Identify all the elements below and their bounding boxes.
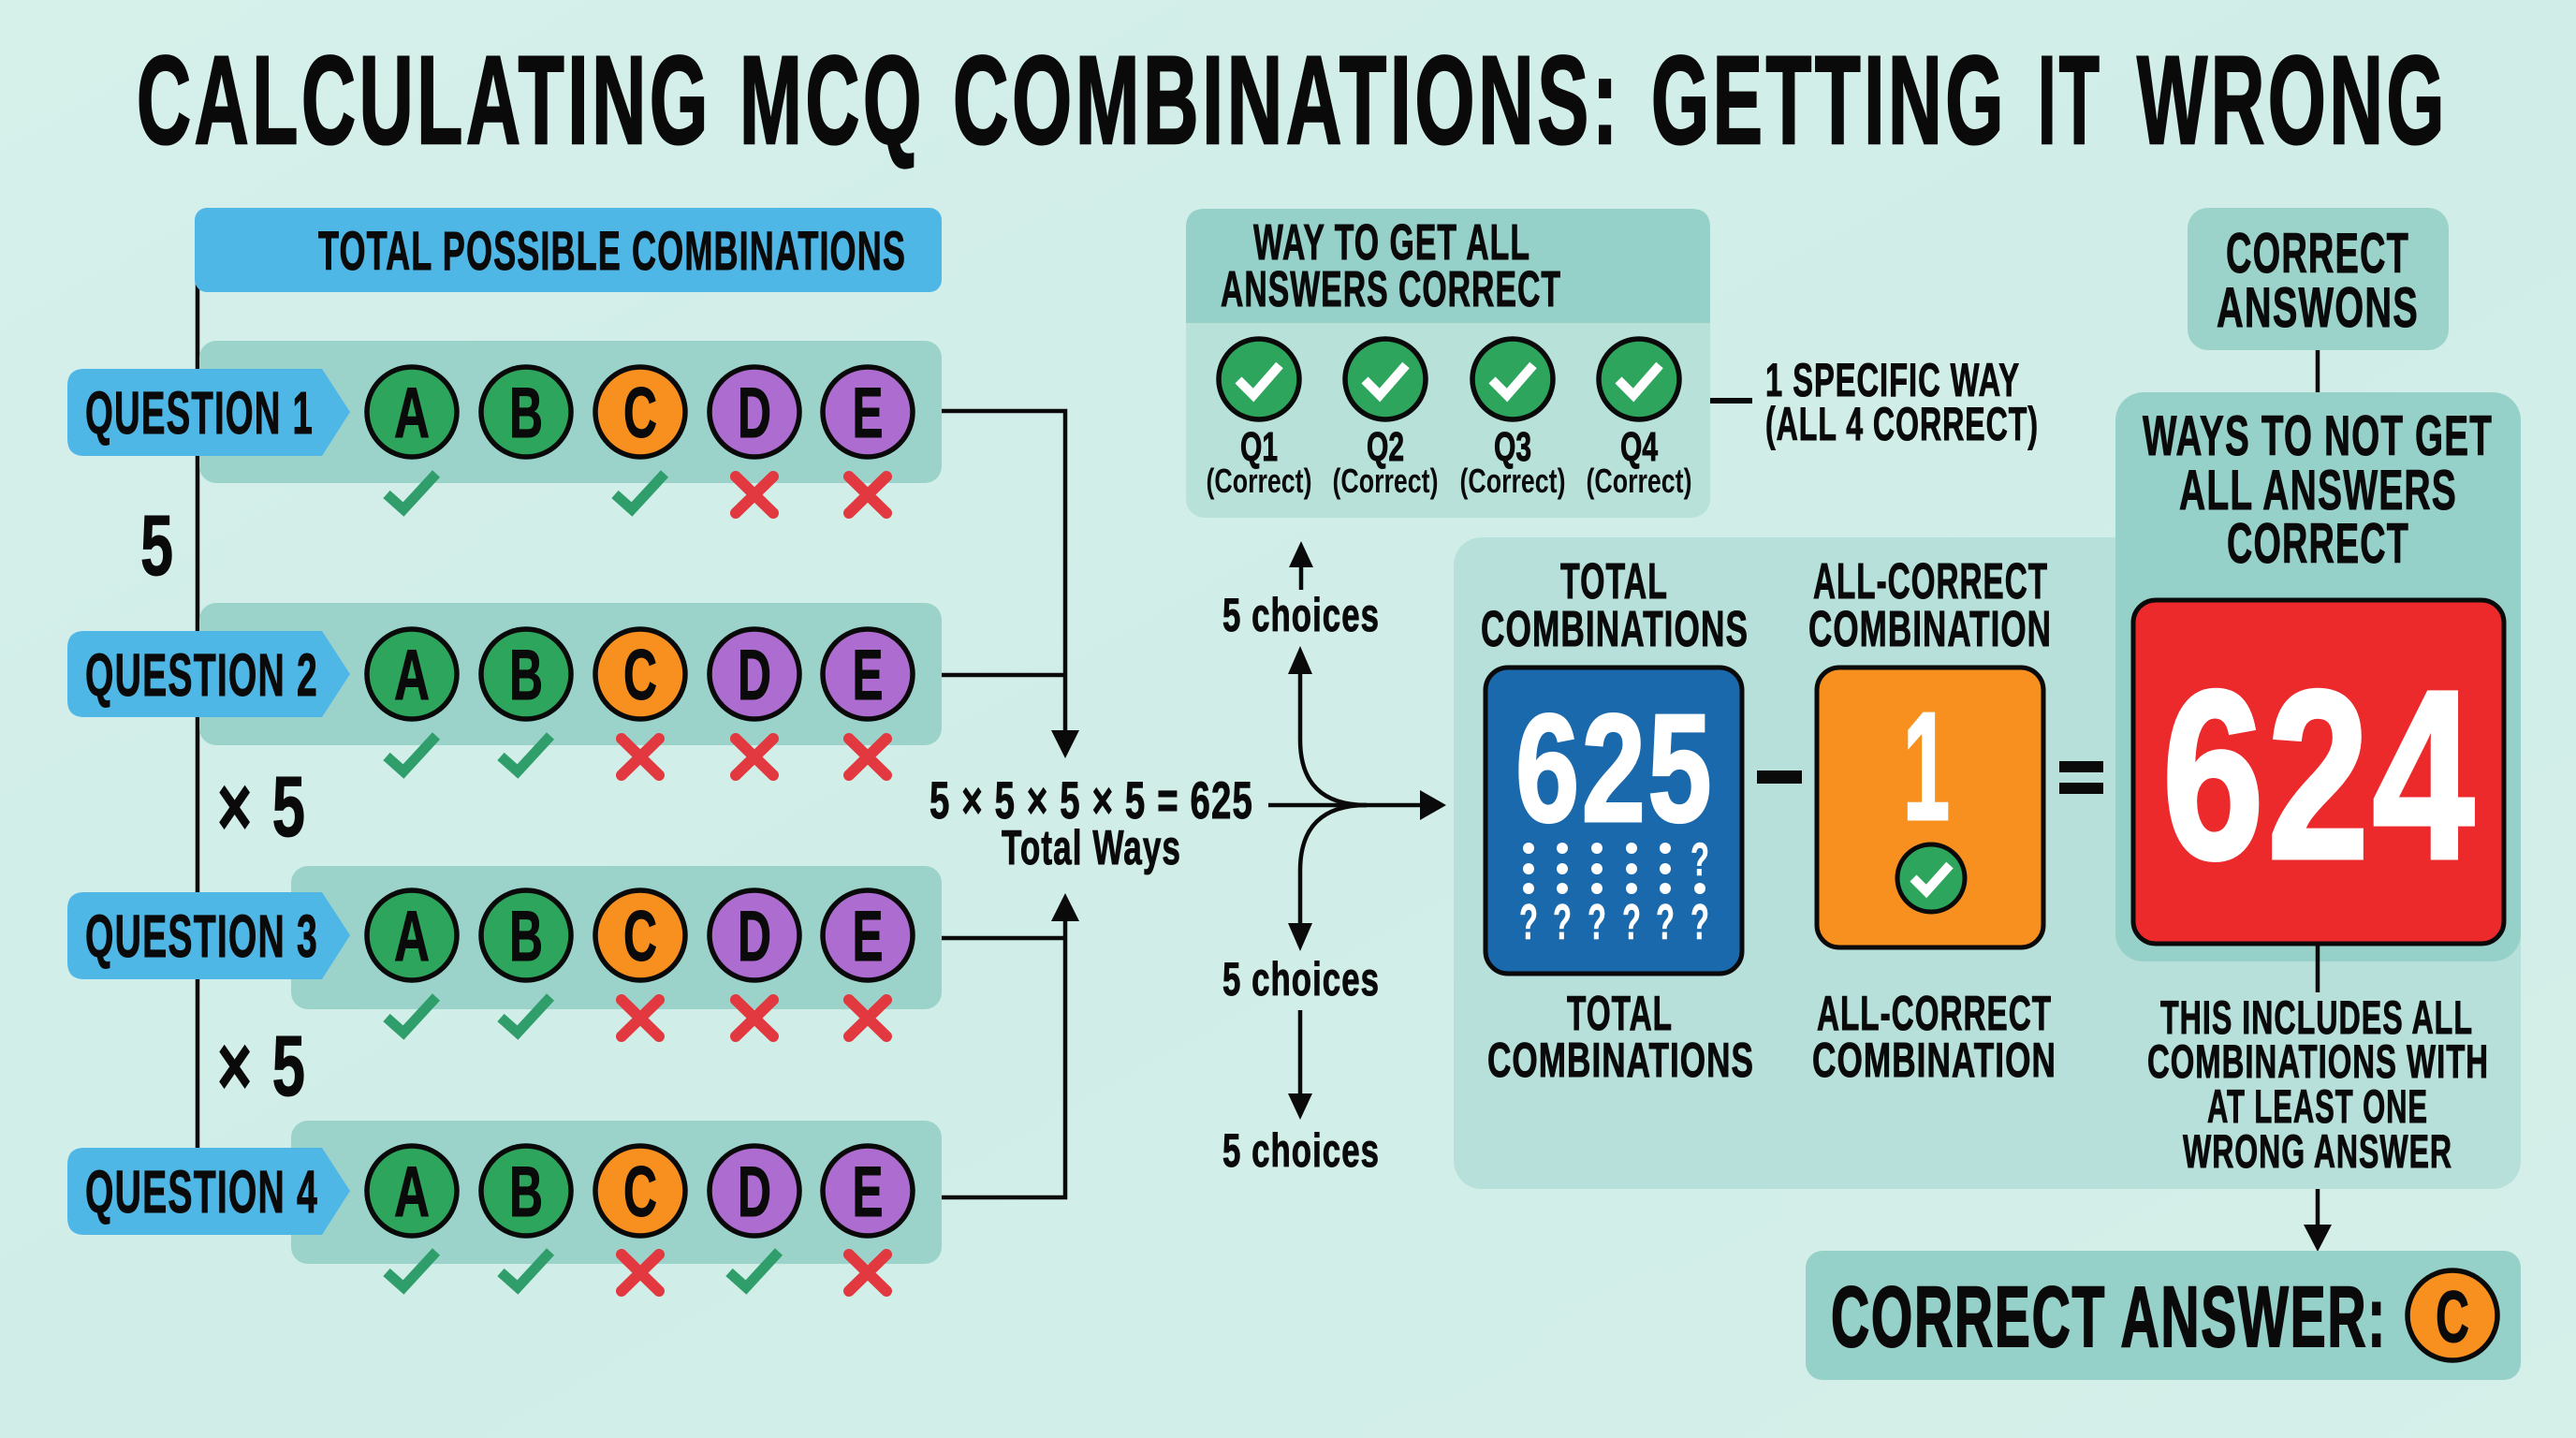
panel: correct answons <box>2188 208 2449 350</box>
spine line linking the questions <box>196 281 199 1156</box>
header: total possible combinations: TOTAL POSSIBLE COMBINATIONS <box>318 221 906 282</box>
panel: correct answons: ANSWONS <box>2217 276 2419 339</box>
callout: 1 specific way: (ALL 4 CORRECT) <box>1765 398 2039 450</box>
callout: 1 specific way: 1 SPECIFIC WAY <box>1765 354 2020 406</box>
result box: 624: 624 <box>2162 641 2478 909</box>
heading: all-correct combination: COMBINATION <box>1808 601 2052 657</box>
title <box>137 31 2448 170</box>
card: 625 total combinations: 625 <box>1515 682 1714 854</box>
panel: question 1: C <box>623 374 657 453</box>
operator: equals <box>2059 761 2103 794</box>
panel: way to get all answers correct: WAY TO GET ALL <box>1253 214 1530 271</box>
panel: question 2 <box>67 603 942 775</box>
panel: question 3 <box>67 866 942 1036</box>
panel: question 4: E <box>852 1152 884 1232</box>
panel: question 2: B <box>509 636 543 715</box>
card: 625 total combinations: ? <box>1588 894 1606 950</box>
panel: way to get all answers correct: Q2 <box>1367 424 1404 470</box>
panel: question 3: C <box>623 897 657 976</box>
branching arrows <box>1268 541 1446 1120</box>
panel: correct answer <box>1806 1251 2521 1380</box>
panel: question 1: B <box>509 374 543 453</box>
multiplier: times 5 (first): × 5 <box>217 759 307 855</box>
panel: question 2: A <box>394 636 430 715</box>
panel: way to get all answers correct: Q1 <box>1240 424 1278 470</box>
panel: question 4 <box>67 1121 942 1291</box>
label: 5 choices (middle): 5 choices <box>1222 953 1380 1005</box>
panel: question 3: QUESTION 3 <box>85 902 318 970</box>
panel: correct answons: CORRECT <box>2226 222 2409 285</box>
panel: question 4: C <box>623 1152 657 1232</box>
text block: includes at least one wrong answer <box>2147 991 2489 1178</box>
panel: way to get all answers correct <box>1186 209 1710 518</box>
panel: way to get all answers correct: (Correct) <box>1206 462 1312 500</box>
panel: question 1: QUESTION 1 <box>85 379 314 447</box>
panel: way to get all answers correct: (Correct) <box>1333 462 1438 500</box>
calculation text: Total Ways <box>1002 821 1181 875</box>
title: GETTING <box>1651 31 2007 170</box>
panel: subtraction calculation <box>1454 537 2521 1189</box>
panel: question 2: C <box>623 636 657 715</box>
label: 5 choices (bottom): 5 choices <box>1222 1124 1380 1177</box>
heading: all-correct combination: ALL-CORRECT <box>1813 553 2048 609</box>
label: 5 choices (top): 5 choices <box>1222 589 1380 641</box>
caption: all-correct combination: ALL-CORRECT <box>1817 987 2052 1041</box>
operator: minus <box>1757 770 1802 784</box>
panel: question 2: D <box>738 636 771 715</box>
card: 625 total combinations: ? <box>1690 894 1709 950</box>
multiplier: times 5 (second): × 5 <box>217 1019 307 1114</box>
panel: ways to not get all answers correct: CORRECT <box>2227 512 2409 575</box>
panel: question 3: D <box>738 897 771 976</box>
multiplier: 5: 5 <box>140 498 175 594</box>
caption: total combinations: TOTAL <box>1567 987 1673 1041</box>
panel: way to get all answers correct: Q3 <box>1494 424 1531 470</box>
caption: all-correct combination: COMBINATION <box>1812 1034 2056 1088</box>
panel: question 1: A <box>394 374 430 453</box>
panel: question 4: D <box>738 1152 771 1232</box>
panel: question 1 <box>67 341 942 513</box>
card: 1 all-correct combination: 1 <box>1903 681 1950 852</box>
card: 625 total combinations: ? <box>1553 894 1572 950</box>
panel: way to get all answers correct: (Correct) <box>1586 462 1692 500</box>
panel: question 1: E <box>852 374 884 453</box>
title: COMBINATIONS: <box>953 31 1621 170</box>
caption: all-correct combination <box>1812 987 2056 1088</box>
calculation text <box>929 770 1253 875</box>
card: 625 total combinations: ? <box>1656 894 1675 950</box>
panel: question 3: A <box>394 897 430 976</box>
heading: all-correct combination <box>1808 553 2052 657</box>
panel: question 1: D <box>738 374 771 453</box>
arrow to correct answer <box>2304 1189 2332 1252</box>
callout: 1 specific way <box>1710 354 2039 450</box>
card: 625 total combinations: ? <box>1519 894 1538 950</box>
panel: way to get all answers correct: Q4 <box>1620 424 1658 470</box>
card: 1 all-correct combination <box>1817 668 2043 947</box>
panel: way to get all answers correct: (Correct) <box>1460 462 1565 500</box>
connector arrows from questions to the calculation <box>942 411 1079 1197</box>
caption: total combinations <box>1487 987 1754 1088</box>
panel: question 4: B <box>509 1152 543 1232</box>
icon: check in circle <box>1897 844 1965 912</box>
card: 625 total combinations: ? <box>1690 833 1709 886</box>
panel: question 3: B <box>509 897 543 976</box>
heading: total combinations: COMBINATIONS <box>1481 601 1749 657</box>
title: MCQ <box>739 31 925 170</box>
calculation text: 5 × 5 × 5 × 5 = 625 <box>929 770 1253 829</box>
heading: total combinations: TOTAL <box>1560 553 1668 609</box>
panel: ways to not get all answers correct <box>2115 392 2521 961</box>
caption: total combinations: COMBINATIONS <box>1487 1034 1754 1088</box>
panel: correct answer: C <box>2436 1275 2469 1357</box>
card: 625 total combinations: ? <box>1622 894 1641 950</box>
header: total possible combinations <box>195 208 942 292</box>
panel: question 2: E <box>852 636 884 715</box>
result box: 624 <box>2133 600 2504 944</box>
heading: total combinations <box>1481 553 1749 657</box>
title: IT <box>2038 31 2102 170</box>
panel: question 4: A <box>394 1152 430 1232</box>
title: CALCULATING <box>137 31 711 170</box>
panel: question 3: E <box>852 897 884 976</box>
panel: question 2: QUESTION 2 <box>85 641 318 709</box>
panel: way to get all answers correct: ANSWERS CORRECT <box>1221 261 1561 317</box>
text block: includes at least one wrong answer: AT LEAST ONE <box>2207 1080 2428 1133</box>
panel: question 4: QUESTION 4 <box>85 1158 318 1225</box>
card: 625 total combinations <box>1486 668 1742 974</box>
